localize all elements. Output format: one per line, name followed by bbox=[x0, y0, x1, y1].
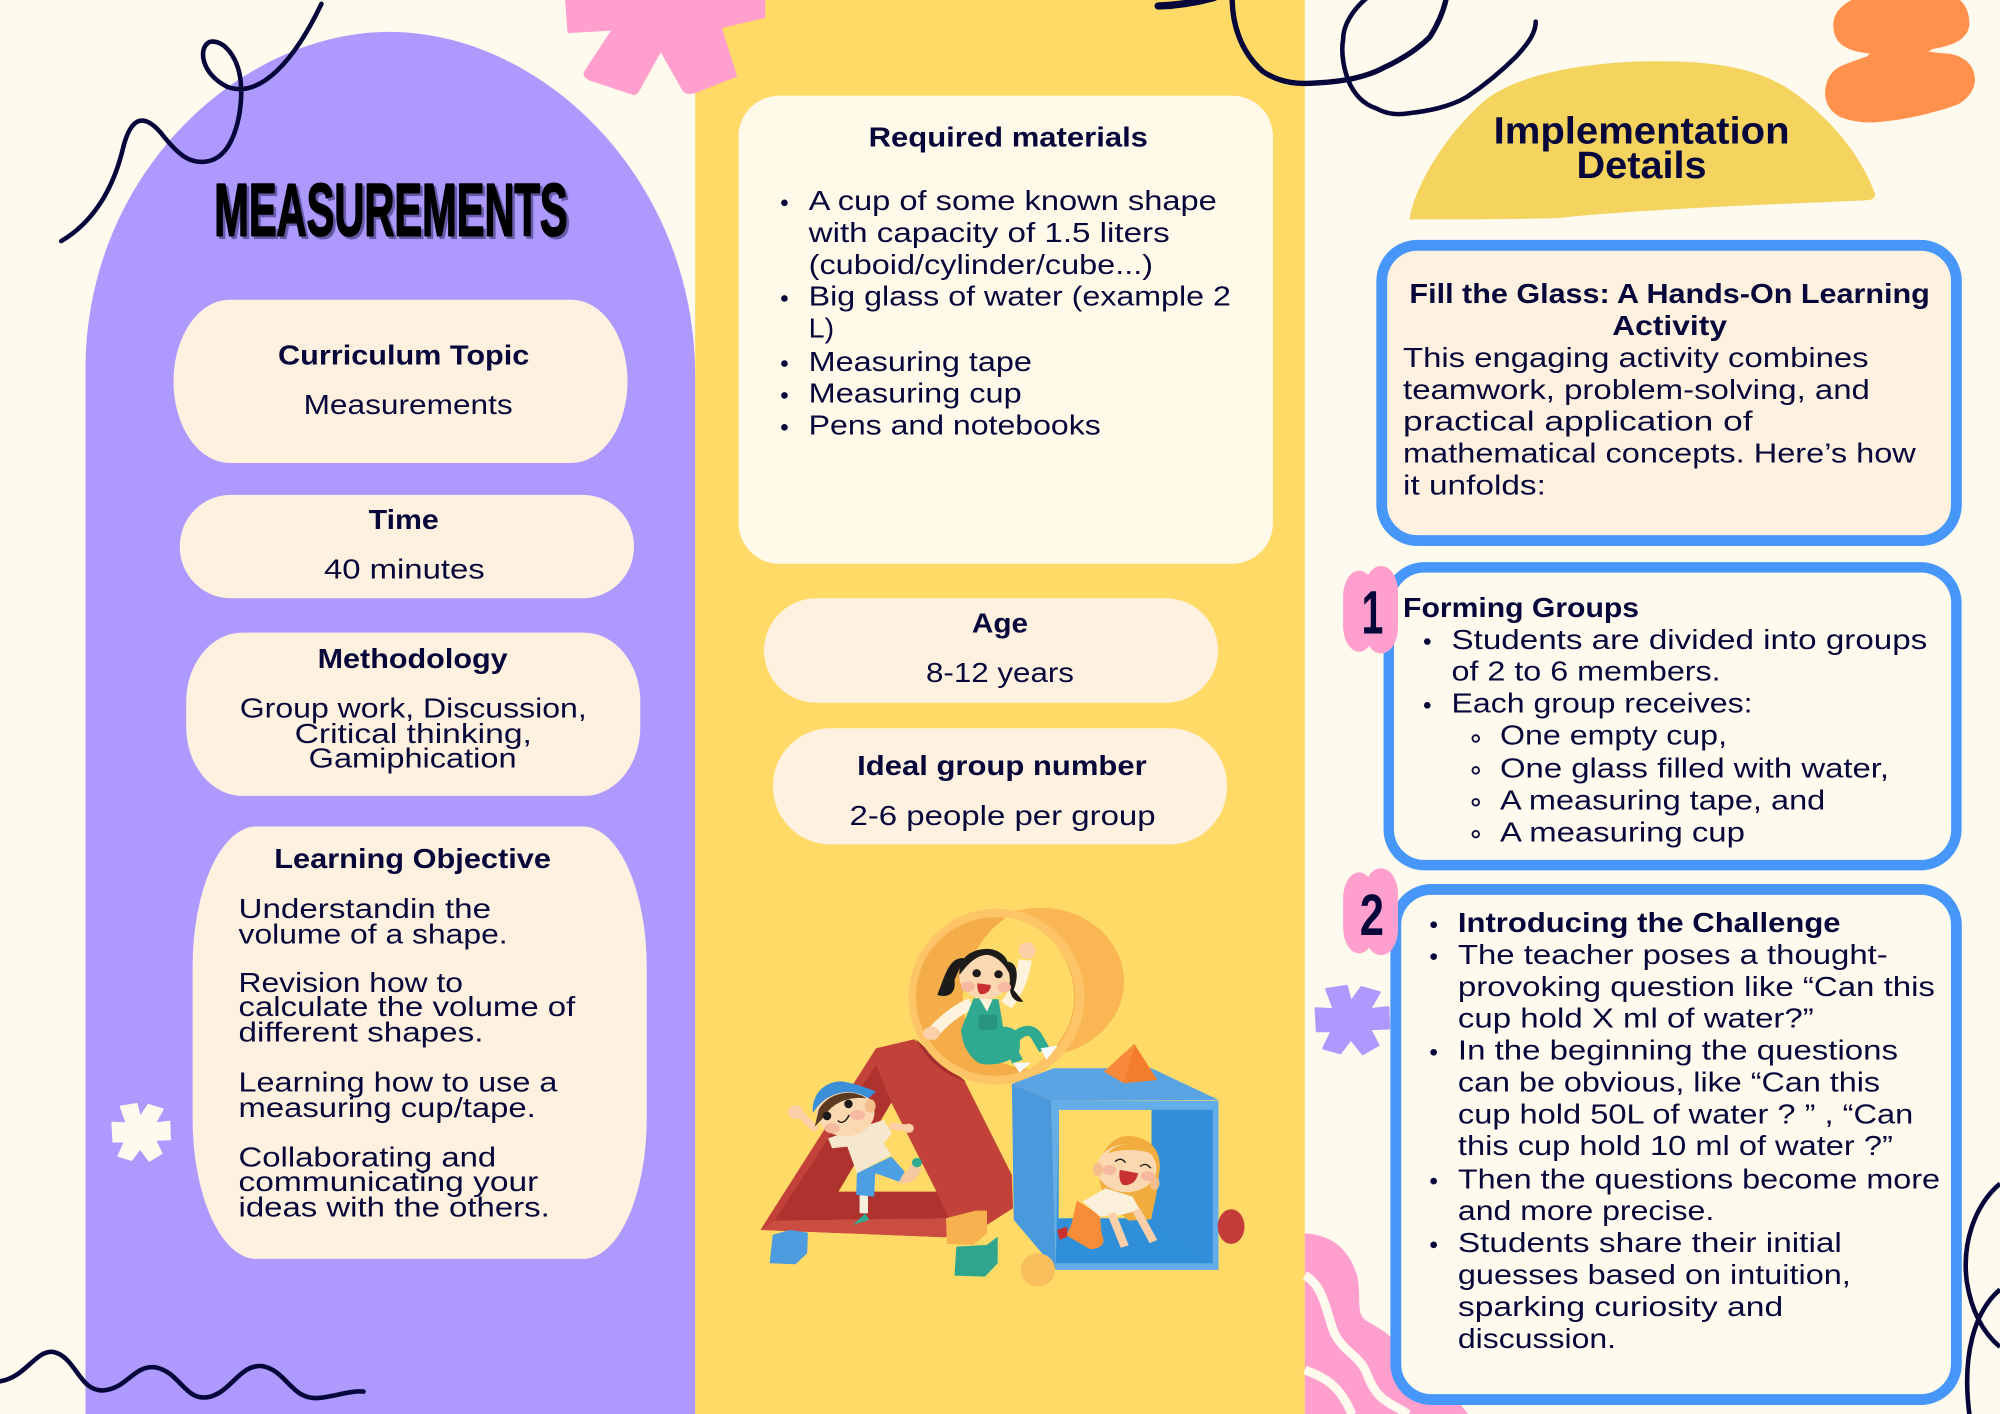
panel: activity introduction bbox=[1382, 245, 1956, 541]
panel: time bbox=[180, 495, 634, 598]
panel: ideal group number bbox=[773, 728, 1227, 844]
orange cylinder ring bbox=[909, 908, 1124, 1085]
panel: step 1 forming groups: of 2 to 6 members. bbox=[1452, 656, 1721, 687]
child: girl in the ring bbox=[923, 942, 1058, 1073]
panel: step 2 introducing the challenge: cup hold 50L of water ? ” , “Can bbox=[1458, 1098, 1913, 1129]
blue cube bbox=[1012, 1068, 1218, 1270]
panel: age: Age bbox=[972, 607, 1028, 638]
child: boy with blue cap bbox=[788, 1081, 922, 1225]
panel: learning objective: measuring cup/tape. bbox=[239, 1092, 536, 1123]
panel: learning objective: Revision how to bbox=[239, 967, 463, 998]
panel: step 1 forming groups: One glass filled with water, bbox=[1500, 753, 1889, 784]
panel: time: 40 minutes bbox=[324, 554, 485, 585]
heading: implementation details shape bbox=[1409, 61, 1875, 219]
panel: learning objective bbox=[193, 827, 647, 1259]
panel: curriculum topic: Curriculum Topic bbox=[278, 339, 529, 370]
panel: yellow centre column bbox=[695, 0, 1305, 1414]
panel: required materials: Measuring tape bbox=[809, 346, 1032, 377]
panel: step 2 introducing the challenge: guesses based on intuition, bbox=[1458, 1259, 1851, 1290]
panel: activity introduction: Fill the Glass: A Hands-On Learning bbox=[1409, 278, 1930, 309]
badge: number 1: 1 bbox=[1362, 579, 1383, 647]
panel: required materials: Pens and notebooks bbox=[809, 410, 1101, 441]
heading: implementation details shape: Details bbox=[1577, 144, 1707, 187]
panel: step 2 introducing the challenge: cup hold X ml of water?” bbox=[1458, 1003, 1814, 1034]
panel: methodology: Gamiphication bbox=[309, 742, 517, 773]
decoration: right squiggle bbox=[1966, 1184, 2000, 1414]
panel: methodology: Critical thinking, bbox=[295, 718, 532, 749]
panel: step 2 introducing the challenge: sparking curiosity and bbox=[1458, 1291, 1783, 1322]
panel: learning objective: different shapes. bbox=[239, 1017, 483, 1048]
panel: activity introduction: it unfolds: bbox=[1403, 470, 1546, 501]
panel: purple arch bbox=[85, 32, 695, 1414]
icon: white asterisk bbox=[112, 1104, 170, 1161]
panel: curriculum topic: Measurements bbox=[304, 389, 513, 420]
panel: required materials: Big glass of water (example 2 bbox=[809, 281, 1231, 312]
decoration: top squiggle bbox=[1158, 0, 1536, 114]
heading: implementation details shape: Implementation bbox=[1494, 110, 1790, 153]
panel: step 2 introducing the challenge: can be obvious, like “Can this bbox=[1458, 1066, 1880, 1097]
panel: step 2 introducing the challenge: discussion. bbox=[1458, 1323, 1616, 1354]
panel: activity introduction: This engaging activity combines bbox=[1403, 342, 1869, 373]
panel: step 1 forming groups: One empty cup, bbox=[1500, 719, 1727, 750]
panel: learning objective: communicating your bbox=[239, 1166, 538, 1197]
panel: step 1 forming groups: A measuring tape, and bbox=[1500, 785, 1825, 816]
panel: learning objective: Understandin the bbox=[239, 893, 491, 924]
panel: ideal group number: Ideal group number bbox=[857, 750, 1147, 781]
icon: orange shape bbox=[1825, 0, 1975, 122]
panel: step 1 forming groups: Students are divided into groups bbox=[1452, 624, 1927, 655]
panel: required materials: A cup of some known shape bbox=[809, 185, 1217, 216]
panel: step 2 introducing the challenge: and more precise. bbox=[1458, 1195, 1714, 1226]
panel: methodology bbox=[186, 633, 640, 796]
panel: step 2 introducing the challenge bbox=[1396, 889, 1956, 1400]
panel: activity introduction: Activity bbox=[1612, 310, 1727, 341]
panel: methodology: Group work, Discussion, bbox=[240, 693, 587, 724]
panel: learning objective: ideas with the others. bbox=[239, 1191, 550, 1222]
illustration: children playing on shapes bbox=[760, 908, 1245, 1287]
badge: number 2: 2 bbox=[1360, 883, 1384, 948]
panel: step 1 forming groups: Each group receives: bbox=[1452, 688, 1753, 719]
panel: required materials bbox=[739, 96, 1273, 564]
panel: step 1 forming groups: Forming Groups bbox=[1403, 592, 1639, 623]
panel: required materials: (cuboid/cylinder/cube...) bbox=[809, 249, 1153, 280]
panel: learning objective: Learning how to use a bbox=[239, 1066, 558, 1097]
panel: age: 8-12 years bbox=[926, 657, 1074, 688]
child: girl with blonde hair bbox=[1057, 1136, 1160, 1249]
panel: step 2 introducing the challenge: In the beginning the questions bbox=[1458, 1035, 1898, 1066]
panel: step 2 introducing the challenge: provoking question like “Can this bbox=[1458, 971, 1935, 1002]
panel: required materials: L) bbox=[809, 313, 834, 344]
panel: required materials: Required materials bbox=[869, 121, 1148, 152]
panel: required materials: with capacity of 1.5 liters bbox=[807, 217, 1170, 248]
panel: step 2 introducing the challenge: Then the questions become more bbox=[1458, 1163, 1940, 1194]
icon: purple asterisk bbox=[1316, 986, 1389, 1054]
panel: learning objective: volume of a shape. bbox=[239, 918, 508, 949]
decoration: pink flower bbox=[565, 0, 765, 95]
panel: activity introduction: teamwork, problem-solving, and bbox=[1403, 374, 1870, 405]
panel: step 2 introducing the challenge: this cup hold 10 ml of water ?” bbox=[1458, 1130, 1893, 1161]
panel: curriculum topic bbox=[173, 300, 628, 463]
badge: number 2 bbox=[1343, 868, 1398, 955]
red triangular prism bbox=[760, 1039, 1013, 1237]
panel: methodology: Methodology bbox=[318, 643, 508, 674]
panel: activity introduction: mathematical concepts. Here’s how bbox=[1403, 438, 1917, 469]
panel: learning objective: calculate the volume of bbox=[239, 991, 575, 1022]
panel: step 2 introducing the challenge: The teacher poses a thought- bbox=[1458, 939, 1888, 970]
panel: step 1 forming groups: A measuring cup bbox=[1500, 816, 1745, 847]
decoration: bottom-left squiggle bbox=[0, 1352, 364, 1398]
badge: number 1 bbox=[1343, 566, 1398, 653]
panel: activity introduction: practical application of bbox=[1403, 406, 1753, 437]
panel: required materials: Measuring cup bbox=[809, 378, 1022, 409]
decoration: pink wave bbox=[1305, 1233, 1468, 1414]
panel: step 1 forming groups bbox=[1389, 567, 1956, 865]
decoration: left squiggle bbox=[61, 4, 321, 241]
title: MEASUREMENTS bbox=[214, 169, 568, 252]
panel: step 2 introducing the challenge: Students share their initial bbox=[1458, 1227, 1842, 1258]
panel: learning objective: Learning Objective bbox=[274, 843, 551, 874]
panel: ideal group number: 2-6 people per group bbox=[849, 800, 1156, 831]
panel: step 2 introducing the challenge: Introducing the Challenge bbox=[1458, 907, 1841, 938]
pyramid bbox=[1104, 1044, 1157, 1083]
panel: age bbox=[764, 598, 1218, 703]
panel: time: Time bbox=[369, 504, 439, 535]
panel: learning objective: Collaborating and bbox=[239, 1142, 496, 1173]
blocks and balls bbox=[770, 1209, 1245, 1287]
